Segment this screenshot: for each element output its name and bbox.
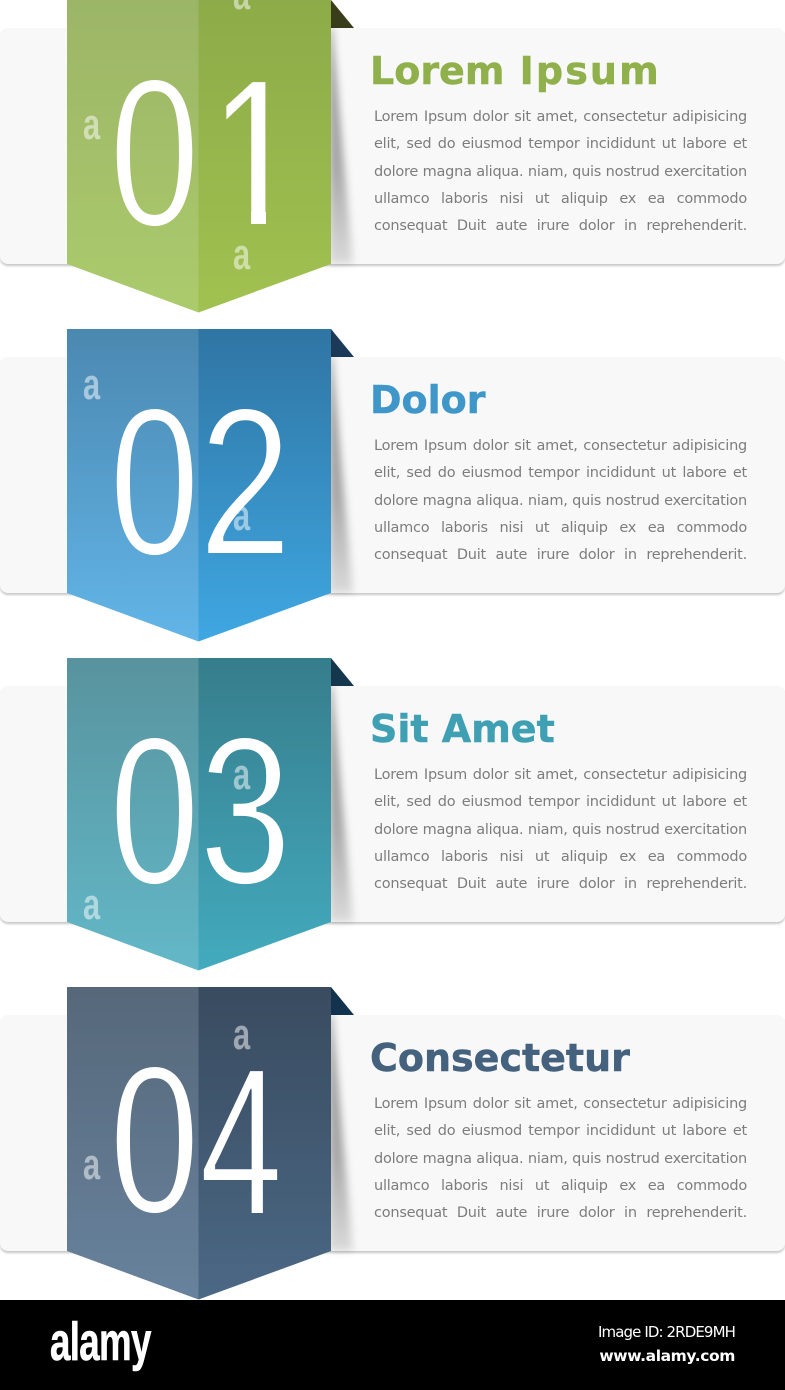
footer bar: [0, 1300, 785, 1390]
text block 03: elit, sed do eiusmod tempor incididunt ut labore et: [374, 794, 747, 810]
logo: alamy: alamy: [50, 1311, 152, 1372]
text block 02: consequat Duit aute irure dolor in reprehenderit.: [374, 547, 747, 563]
ribbon 03: a: [233, 751, 251, 799]
ribbon 04: 4: [200, 1023, 282, 1260]
heading: Sit Amet: Sit Amet: [370, 707, 555, 751]
heading: Consectetur: Consectetur: [370, 1036, 630, 1080]
ribbon 01: a: [233, 231, 251, 279]
text block 01: dolore magna aliqua. niam, quis nostrud exercitation: [374, 164, 747, 180]
text block 01: consequat Duit aute irure dolor in reprehenderit.: [374, 218, 747, 234]
text block 02: [374, 438, 747, 563]
text block 02: Lorem Ipsum dolor sit amet, consectetur adipisicing: [374, 438, 747, 454]
ribbon 01: [67, 0, 355, 312]
ribbon 01: 1: [211, 34, 300, 271]
ribbon 02: 2: [200, 364, 291, 601]
ribbon 01: 0: [110, 34, 199, 271]
panel: step 03: [0, 658, 785, 970]
ribbon 03: [67, 658, 355, 970]
text block 02: elit, sed do eiusmod tempor incididunt ut labore et: [374, 465, 747, 481]
text block 04: consequat Duit aute irure dolor in reprehenderit.: [374, 1205, 747, 1221]
card background: [0, 357, 785, 593]
heading: Dolor: Dolor: [370, 378, 486, 422]
text block 03: ullamco laboris nisi ut aliquip ex ea commodo: [374, 849, 747, 865]
ribbon 04: a: [83, 1141, 101, 1189]
ribbon 04: 0: [110, 1021, 199, 1258]
text block 02: dolore magna aliqua. niam, quis nostrud exercitation: [374, 493, 747, 509]
ribbon 03: a: [83, 881, 101, 929]
text block 04: elit, sed do eiusmod tempor incididunt ut labore et: [374, 1123, 747, 1139]
text block 03: consequat Duit aute irure dolor in reprehenderit.: [374, 876, 747, 892]
text block 04: dolore magna aliqua. niam, quis nostrud exercitation: [374, 1151, 747, 1167]
image id: Image ID: 2RDE9MH: [598, 1323, 735, 1341]
panel: step 02: [0, 329, 785, 642]
text block 03: dolore magna aliqua. niam, quis nostrud exercitation: [374, 822, 747, 838]
text block 01: Lorem Ipsum dolor sit amet, consectetur adipisicing: [374, 109, 747, 125]
ribbon 04: [67, 987, 355, 1300]
ribbon 03: 3: [200, 693, 291, 930]
ribbon 02: [67, 329, 355, 642]
text block 01: elit, sed do eiusmod tempor incididunt ut labore et: [374, 136, 747, 152]
text block 04: [374, 1096, 747, 1221]
panel: step 04: [0, 987, 785, 1300]
text block 04: Lorem Ipsum dolor sit amet, consectetur adipisicing: [374, 1096, 747, 1112]
card background: [0, 28, 785, 264]
text block 03: Lorem Ipsum dolor sit amet, consectetur adipisicing: [374, 767, 747, 783]
text block 04: ullamco laboris nisi ut aliquip ex ea commodo: [374, 1178, 747, 1194]
ribbon 02: a: [233, 492, 251, 540]
ribbon 02: 0: [110, 363, 199, 600]
text block 03: [374, 767, 747, 892]
card background: [0, 1015, 785, 1251]
ribbon 02: a: [83, 361, 101, 409]
panel: step 01: [0, 0, 785, 312]
heading: Lorem Ipsum: Lorem Ipsum: [370, 49, 661, 93]
text block 01: [374, 109, 747, 234]
ribbon 01: a: [83, 101, 101, 149]
card background: [0, 686, 785, 922]
website: www.alamy.com: [599, 1347, 735, 1365]
ribbon 04: a: [233, 1011, 251, 1059]
text block 02: ullamco laboris nisi ut aliquip ex ea commodo: [374, 520, 747, 536]
ribbon 03: 0: [110, 692, 199, 929]
text block 01: ullamco laboris nisi ut aliquip ex ea commodo: [374, 191, 747, 207]
